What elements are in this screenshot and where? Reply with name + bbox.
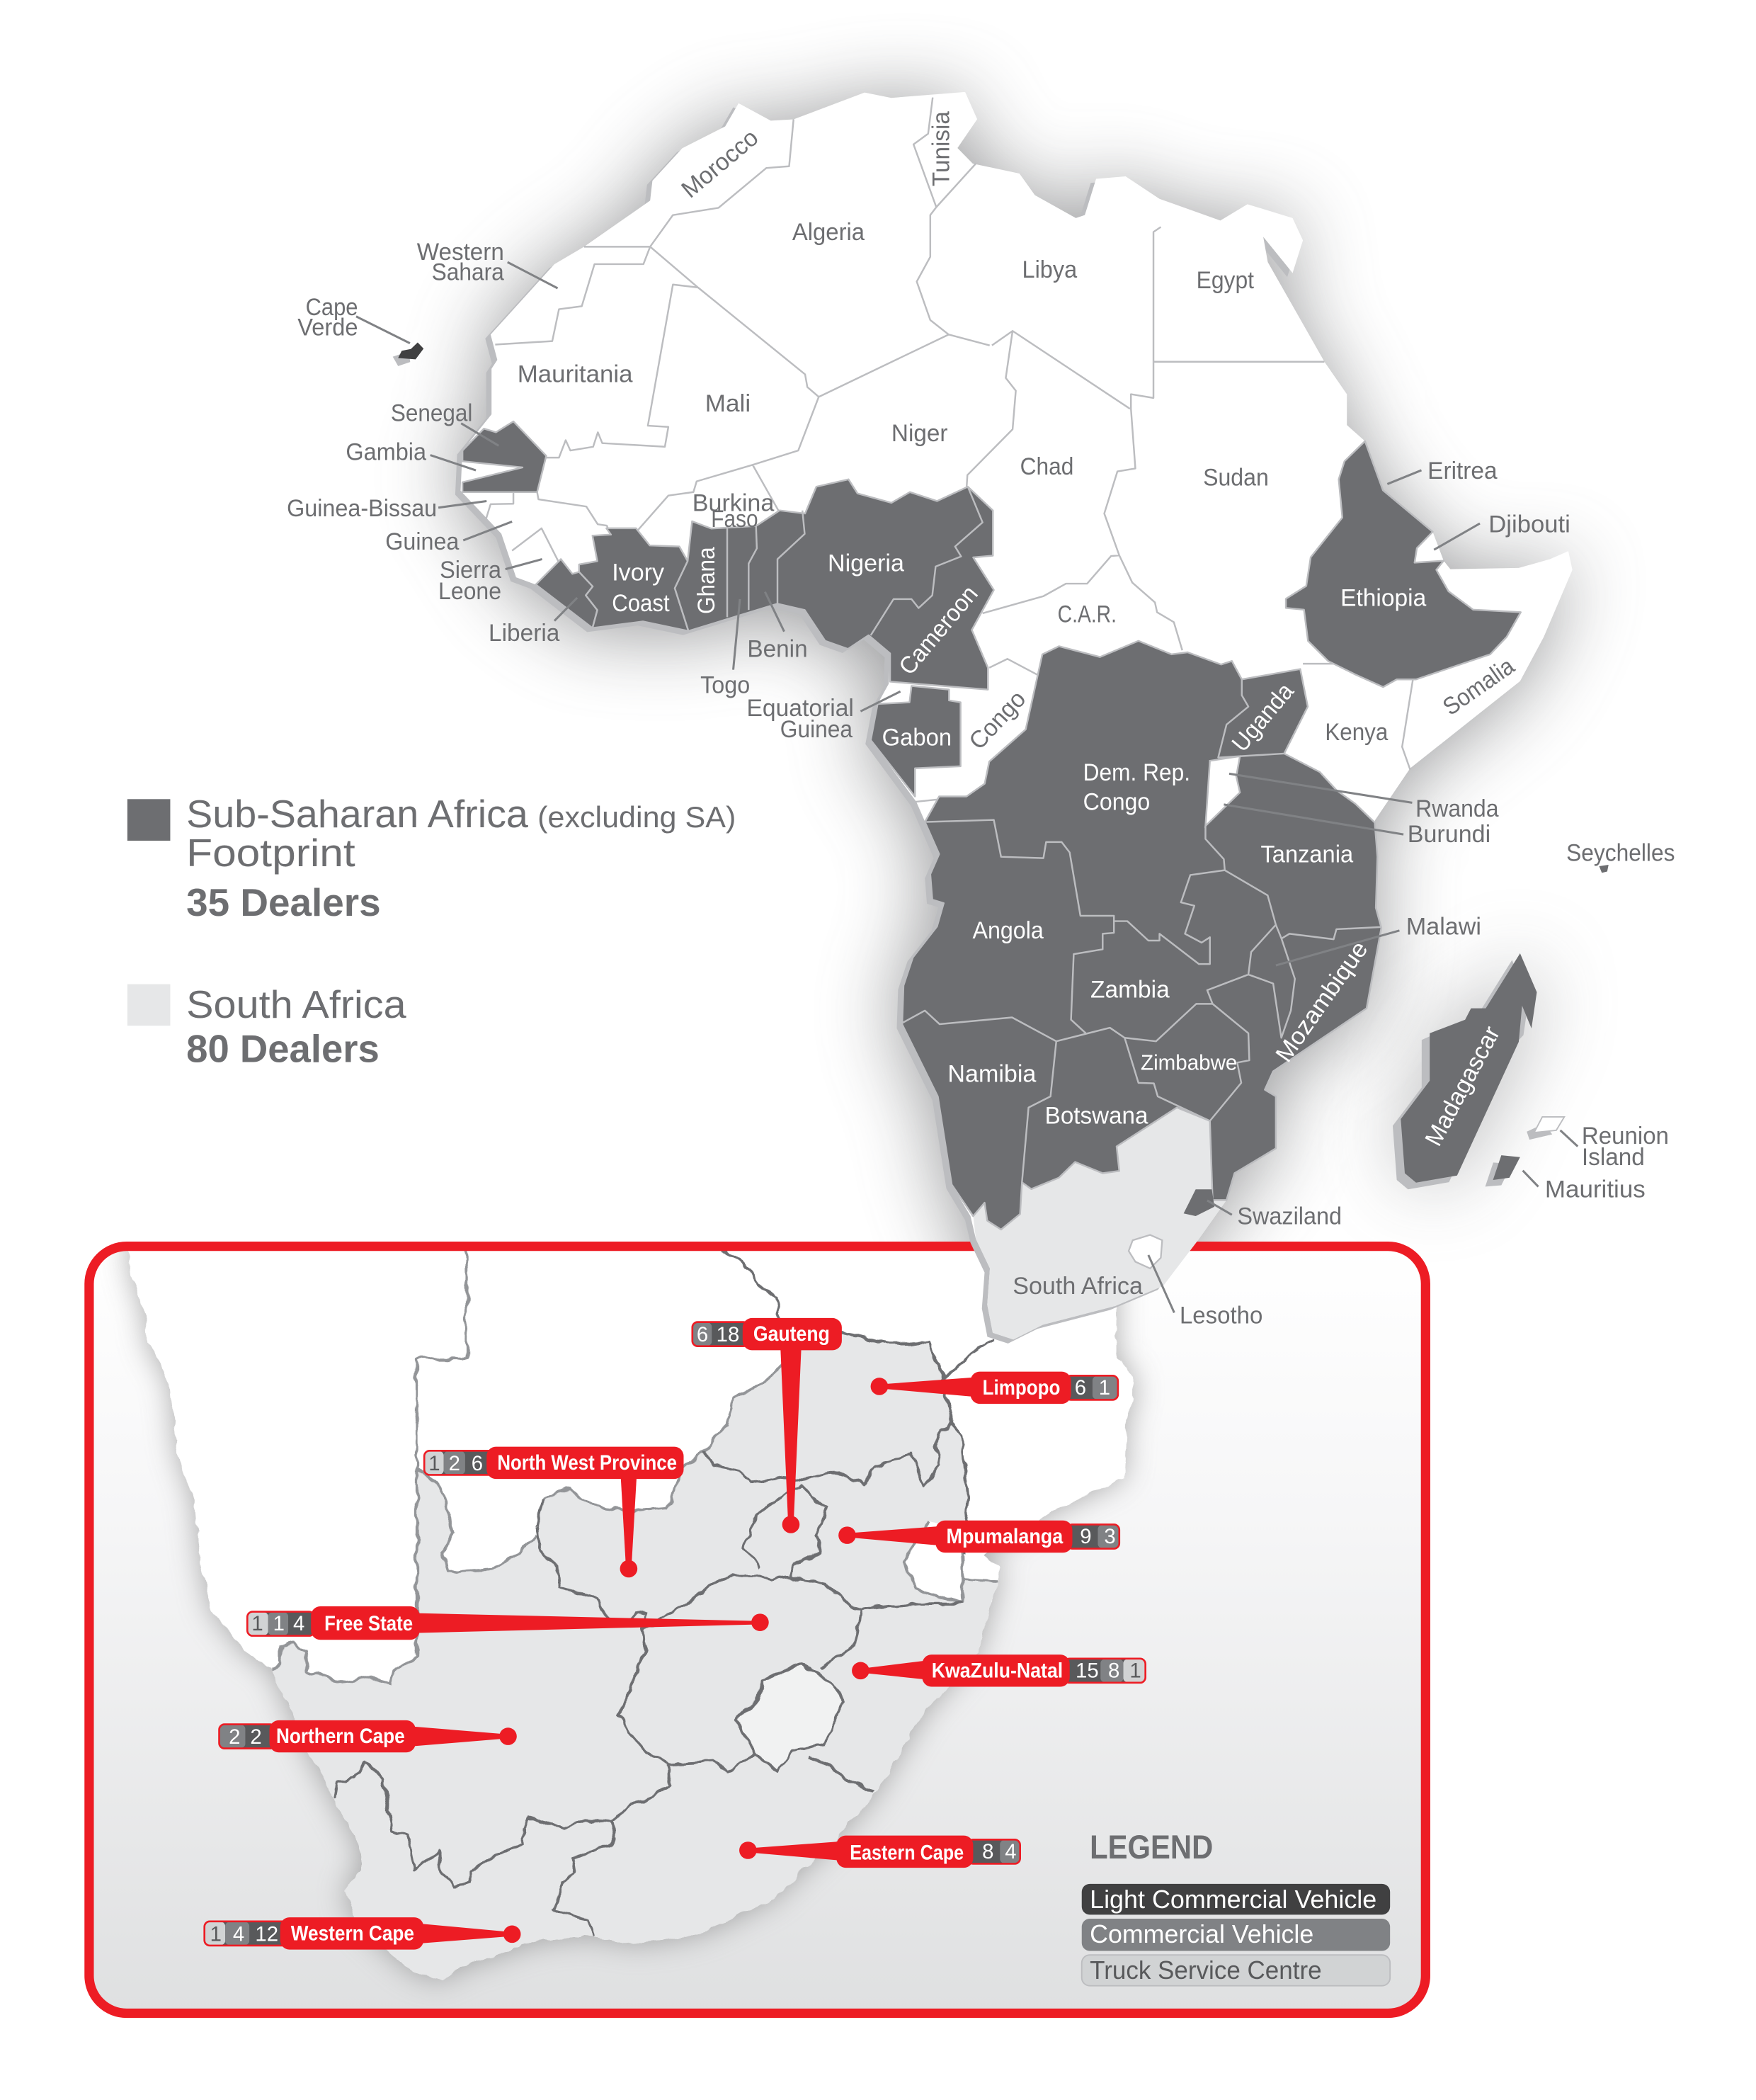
- label: Cape Verde: Verde: [297, 314, 358, 341]
- label: Ivory Coast: [612, 560, 670, 617]
- callout: North West Province: 1: [428, 1452, 440, 1475]
- callout: Gauteng: [692, 1318, 842, 1533]
- callout: KwaZulu-Natal: 1: [1129, 1659, 1141, 1682]
- label: Reunion Island: [1561, 1123, 1669, 1171]
- stat: 80 dealers: 80 Dealers: [186, 1026, 380, 1070]
- callout: Gauteng: Gauteng: [753, 1322, 830, 1346]
- label: Guinea: Guinea: [385, 528, 459, 555]
- callout: KwaZulu-Natal: KwaZulu-Natal: [932, 1659, 1063, 1682]
- label: Liberia: [489, 598, 577, 647]
- legend: commercial vehicle: [1082, 1919, 1390, 1951]
- callout: North West Province: 6: [472, 1452, 483, 1475]
- label: Western Sahara: Sahara: [432, 259, 504, 286]
- callout: Eastern Cape: Eastern Cape: [850, 1841, 964, 1865]
- label: Ivory Coast: Coast: [612, 590, 670, 617]
- icon: mauritius: [1486, 1155, 1520, 1186]
- callout: Free State: Free State: [324, 1612, 413, 1635]
- label: Malawi: Malawi: [1406, 914, 1481, 941]
- label: Swaziland: [1207, 1201, 1342, 1230]
- callout: Free State: 1: [251, 1612, 263, 1635]
- label: Sierra Leone: Leone: [438, 578, 501, 605]
- callout: KwaZulu-Natal: 15: [1076, 1659, 1099, 1682]
- liberia: [536, 559, 598, 628]
- icon: cape verde: [393, 343, 423, 366]
- callout: Western Cape: [205, 1917, 520, 1950]
- label: Lesotho: Lesotho: [1180, 1302, 1262, 1329]
- label: Tanzania: Tanzania: [1260, 841, 1353, 868]
- label: Egypt: Egypt: [1197, 267, 1255, 294]
- callout: Northern Cape: Northern Cape: [276, 1725, 405, 1748]
- label: Cape Verde: Cape: [306, 294, 358, 321]
- label: Congo: Congo: [964, 686, 1031, 755]
- callout: Free State: [247, 1606, 769, 1640]
- label: Malawi: [1276, 914, 1481, 965]
- stat: 35 dealers: 35 Dealers: [186, 880, 381, 924]
- southern and central dark block: [902, 641, 1381, 1230]
- icon: reunion: [1527, 1117, 1564, 1140]
- callout: Limpopo: [871, 1372, 1118, 1404]
- icon: seychelles: [1599, 865, 1609, 873]
- label: Kenya: Kenya: [1325, 719, 1388, 746]
- label: Swaziland: Swaziland: [1237, 1203, 1342, 1230]
- inset map: [127, 1234, 1134, 1981]
- label: Dem. Rep. Congo: [1083, 759, 1190, 815]
- label: C.A.R.: C.A.R.: [1058, 601, 1117, 628]
- callout: Mpumalanga: 9: [1080, 1525, 1092, 1548]
- callout: Western Cape: 4: [233, 1922, 244, 1946]
- label: Burkina Faso: [692, 489, 774, 533]
- callout: Mpumalanga: Mpumalanga: [947, 1525, 1064, 1548]
- label: Somalia: Somalia: [1438, 652, 1520, 721]
- callout: Free State: 4: [293, 1612, 304, 1635]
- callout: North West Province: [424, 1447, 683, 1577]
- legend: vehicle types: [1082, 1829, 1390, 1986]
- label: Botswana: Botswana: [1045, 1102, 1148, 1129]
- label: Burkina Faso: Burkina: [692, 489, 774, 516]
- label: Liberia: Liberia: [489, 620, 559, 647]
- label: South Africa: South Africa: [1013, 1273, 1143, 1300]
- internal borders of dark countries: [727, 487, 1381, 1182]
- label: Namibia: Namibia: [947, 1061, 1036, 1088]
- international borders: [272, 1240, 997, 1683]
- swaziland island patch: [1184, 1189, 1214, 1216]
- label: Burkina Faso: Faso: [711, 506, 758, 533]
- label: Zambia: Zambia: [1090, 976, 1170, 1003]
- callout: North West Province: 2: [449, 1452, 460, 1475]
- callout: Mpumalanga: 3: [1104, 1525, 1116, 1548]
- label: Uganda: Uganda: [1227, 678, 1299, 757]
- label: Chad: Chad: [1020, 453, 1073, 480]
- legend: south africa: [127, 982, 406, 1070]
- coast edge strip: [455, 96, 1567, 1344]
- callout: Northern Cape: [219, 1720, 517, 1752]
- label: Equatorial Guinea: [746, 691, 901, 743]
- swaziland: [904, 1522, 964, 1604]
- label: Senegal: [391, 399, 498, 445]
- ghana togo benin nigeria cameroon block: [675, 479, 994, 690]
- label: Cameroon: Cameroon: [894, 581, 984, 680]
- label: Burundi: [1224, 805, 1490, 848]
- label: Niger: Niger: [891, 420, 947, 447]
- label: Sudan: Sudan: [1203, 464, 1269, 491]
- lesotho: [736, 1664, 843, 1773]
- south africa provinces land: [272, 1332, 997, 1981]
- country labels: [287, 111, 1675, 1329]
- legend: truck service centre: Truck Service Centre: [1090, 1956, 1322, 1985]
- label: Zimbabwe: Zimbabwe: [1141, 1052, 1237, 1075]
- gabon: [871, 686, 961, 797]
- africa map soft shadow: [457, 98, 1568, 1346]
- label: Western Sahara: [417, 239, 558, 288]
- callout: Western Cape: 12: [255, 1922, 278, 1946]
- label: Algeria: Algeria: [792, 219, 865, 246]
- callout: Limpopo: 1: [1099, 1376, 1110, 1400]
- label: Mozambique: Mozambique: [1270, 936, 1373, 1067]
- inset land and borders: [127, 1234, 1134, 1981]
- callout: Northern Cape: 2: [250, 1725, 262, 1749]
- label: Equatorial Guinea: Equatorial: [746, 695, 854, 722]
- swatch: dark grey: [127, 799, 170, 841]
- label: Mauritius: Mauritius: [1545, 1176, 1646, 1203]
- label: Sierra Leone: Sierra: [440, 557, 501, 584]
- ivory coast: [579, 528, 688, 631]
- label: Madagascar: Madagascar: [1420, 1022, 1505, 1150]
- callout: KwaZulu-Natal: [852, 1655, 1146, 1687]
- legend heading: LEGEND: [1090, 1829, 1213, 1866]
- label: Mauritania: Mauritania: [518, 361, 633, 388]
- callout: KwaZulu-Natal: 8: [1108, 1659, 1119, 1682]
- africa land: [460, 92, 1573, 1339]
- provincial borders: [335, 1240, 993, 1936]
- callout: Mpumalanga: [838, 1521, 1119, 1553]
- callout: Gauteng: 6: [697, 1323, 708, 1346]
- inset frame background: [89, 1247, 1425, 2014]
- south africa: [973, 1108, 1226, 1339]
- label: Western Sahara: Western: [417, 239, 504, 266]
- ethiopia: [1286, 441, 1521, 687]
- inset red frame: [89, 1247, 1425, 2014]
- label: Togo: [700, 599, 750, 699]
- label: Seychelles: Seychelles: [1566, 839, 1675, 866]
- callout: Free State: 1: [273, 1612, 285, 1635]
- label: Eritrea: Eritrea: [1427, 458, 1498, 484]
- legend: commercial vehicle: Commercial Vehicle: [1090, 1919, 1313, 1948]
- label: Reunion Island: Island: [1582, 1144, 1645, 1171]
- label: Libya: Libya: [1022, 256, 1077, 283]
- lesotho white patch: [1129, 1235, 1162, 1268]
- label: Dem. Rep. Congo: Congo: [1083, 788, 1150, 815]
- legend: sub-saharan africa footprint: [127, 792, 736, 924]
- label: Rwanda: [1229, 773, 1499, 822]
- label: Gambia: Gambia: [346, 438, 426, 465]
- label: Djibouti: [1434, 511, 1570, 550]
- label: Guinea: [385, 521, 512, 555]
- callout: Limpopo: Limpopo: [983, 1376, 1060, 1400]
- heading: footprint: Footprint: [186, 831, 355, 875]
- north and central african borders: [486, 98, 1413, 802]
- callout: Eastern Cape: [739, 1836, 1020, 1868]
- label: Burundi: Burundi: [1408, 821, 1490, 848]
- label: Ethiopia: Ethiopia: [1340, 585, 1426, 612]
- label: Cape Verde: [297, 294, 410, 344]
- label: Lesotho: [1148, 1255, 1262, 1329]
- label: Benin: [747, 592, 808, 663]
- label: Mali: Mali: [705, 390, 751, 417]
- callout: Western Cape: Western Cape: [291, 1922, 414, 1945]
- label: Mauritius: [1523, 1171, 1646, 1203]
- panel: South Africa provinces inset: [89, 1234, 1425, 2014]
- heading: sub-saharan africa: Sub-Saharan Africa: [186, 792, 528, 836]
- label: Tunisia: Tunisia: [928, 111, 954, 186]
- label: Nigeria: Nigeria: [828, 550, 904, 577]
- label: Senegal: Senegal: [391, 399, 472, 426]
- label: Guinea-Bissau: Guinea-Bissau: [287, 495, 437, 522]
- callout: Limpopo: 6: [1075, 1376, 1086, 1400]
- icon: madagascar: [1393, 953, 1536, 1189]
- callout: Eastern Cape: 8: [982, 1840, 993, 1863]
- label: Morocco: Morocco: [676, 124, 763, 203]
- label: Angola: Angola: [972, 917, 1044, 944]
- label: Gabon: Gabon: [882, 725, 952, 751]
- note: excluding SA: (excluding SA): [537, 800, 736, 834]
- label: Sierra Leone: [438, 557, 542, 605]
- rwanda and burundi: [1205, 756, 1240, 826]
- label: Equatorial Guinea: Guinea: [780, 716, 853, 743]
- label: Dem. Rep. Congo: Dem. Rep.: [1083, 759, 1190, 786]
- label: Ivory Coast: Ivory: [612, 560, 664, 586]
- label: Togo: Togo: [700, 672, 750, 699]
- swatch: light grey: [127, 984, 170, 1026]
- label: Gambia: [346, 438, 476, 470]
- callout: Gauteng: 18: [717, 1323, 739, 1346]
- callout: Eastern Cape: 4: [1005, 1840, 1017, 1863]
- label: Eritrea: [1387, 458, 1498, 484]
- africa map: [393, 92, 1609, 1344]
- heading: south africa: South Africa: [186, 982, 406, 1026]
- senegal: [462, 421, 546, 492]
- legend: light commercial vehicle: Light Commercial Vehicle: [1090, 1885, 1376, 1914]
- callout: Northern Cape: 2: [229, 1725, 240, 1749]
- label: Ghana: Ghana: [693, 547, 720, 614]
- label: Reunion Island: Reunion: [1582, 1123, 1669, 1150]
- label: Benin: Benin: [747, 636, 808, 663]
- label: Djibouti: Djibouti: [1488, 511, 1570, 538]
- label: Rwanda: Rwanda: [1415, 795, 1499, 822]
- callout: Western Cape: 1: [210, 1922, 222, 1946]
- callout: North West Province: North West Province: [497, 1451, 677, 1475]
